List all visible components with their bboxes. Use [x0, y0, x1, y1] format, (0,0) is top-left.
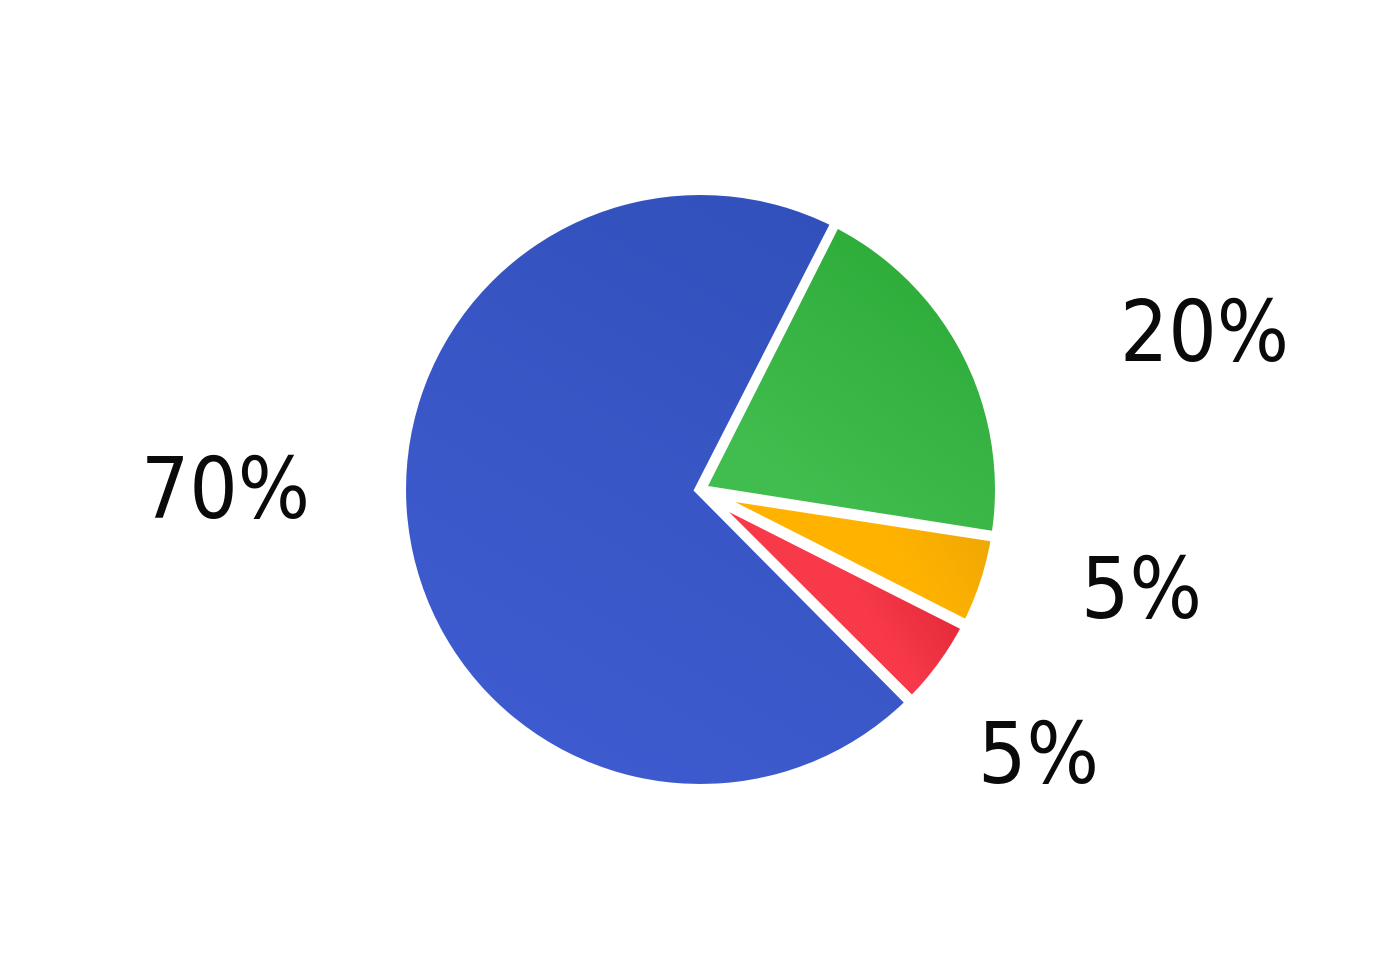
- label: 5% red: 5%: [978, 705, 1099, 804]
- slice: green 20%: [708, 229, 995, 531]
- label: 5% yellow: 5%: [1081, 540, 1202, 639]
- slice: red 5%: [729, 512, 960, 694]
- pie slices: [406, 195, 995, 784]
- label: 70%: 70%: [141, 440, 310, 539]
- slice: blue 70%: [406, 195, 904, 784]
- slice: yellow 5%: [735, 502, 990, 619]
- pie chart with percentage labels: [147, 195, 1285, 784]
- label: 20%: 20%: [1120, 283, 1289, 382]
